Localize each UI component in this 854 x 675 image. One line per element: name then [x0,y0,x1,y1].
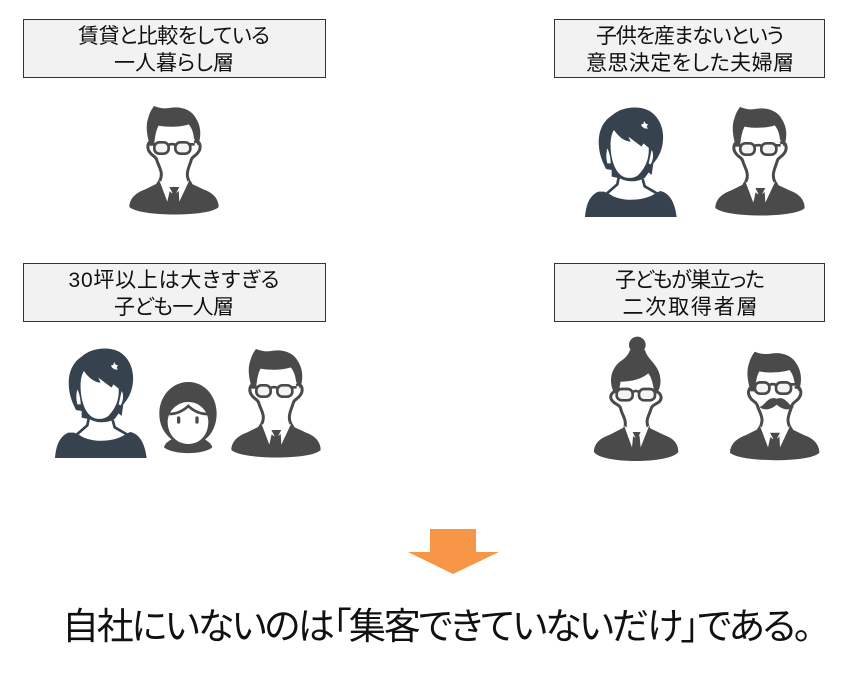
icon: man with glasses [715,107,805,215]
label box: childless couples [554,20,824,78]
icon: man with glasses and mustache [730,352,819,460]
panel: one-child families [24,264,326,458]
label box: one-child families [24,264,326,322]
icon: man with glasses [129,106,219,214]
label box: single renters: 一人暮らし層 [114,52,234,75]
label box: childless couples: 意思決定をした夫婦層 [586,52,794,75]
label box: single renters [24,20,326,78]
icon: man with glasses [231,349,321,457]
label box: empty-nest buyers: 子どもが巣立った [615,269,765,292]
icon: woman [585,107,677,217]
arrow: down [408,529,499,574]
icon: woman [55,348,147,458]
label box: empty-nest buyers: 二次取得者層 [622,296,758,319]
panel: single renters [24,20,326,214]
icon: hooded child [159,382,217,453]
label box: childless couples: 子供を産まないという [596,25,784,48]
panel: childless couples [554,20,824,217]
label box: single renters: 賃貸と比較をしている [78,25,270,48]
label box: one-child families: 子ども一人層 [114,296,234,319]
icon: woman with hair bun [594,337,678,461]
conclusion text: 自社にいないのは「集客できていないだけ」である。 [62,606,812,647]
panel: empty-nest second-home buyers [554,264,824,461]
label box: empty-nest buyers [554,264,824,322]
mustache [759,398,794,409]
label box: one-child families: 30坪以上は大きすぎる [68,269,280,292]
